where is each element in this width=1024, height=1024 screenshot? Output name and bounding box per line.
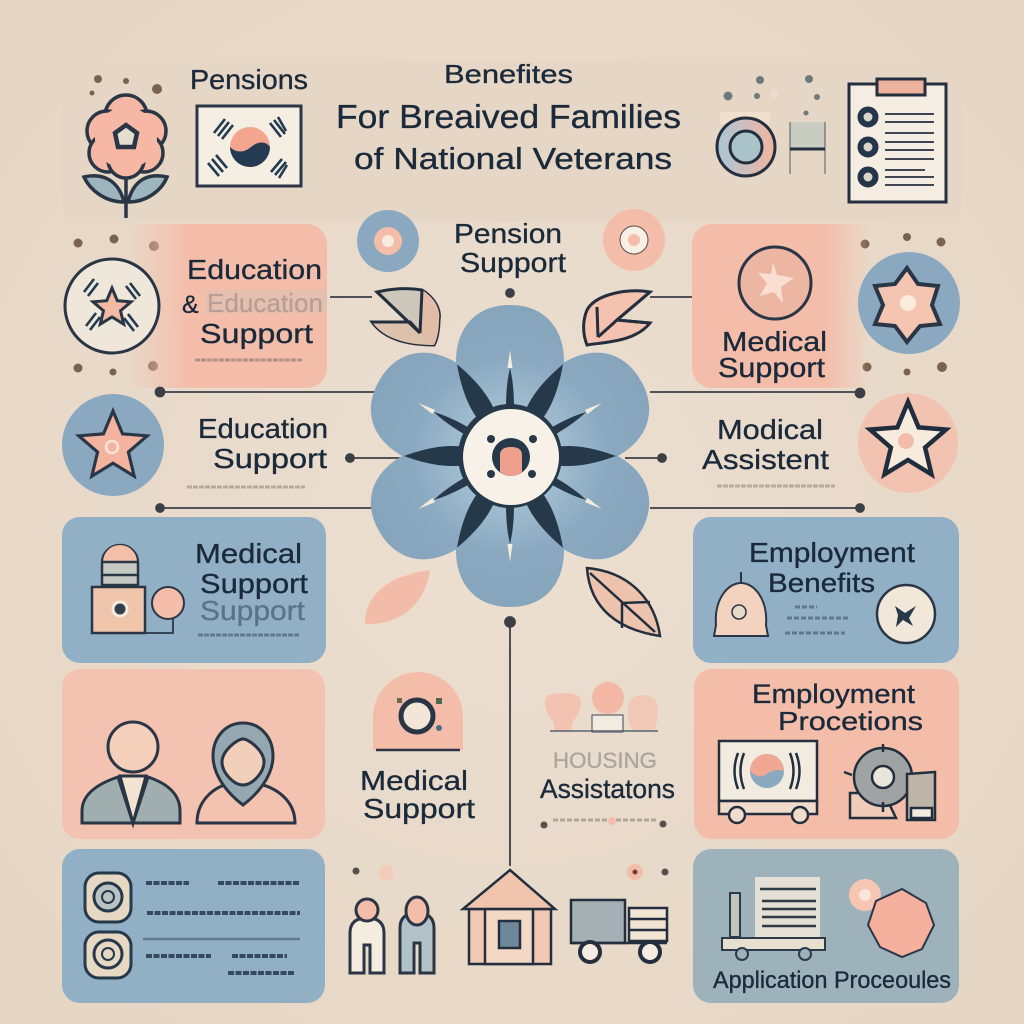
- panel: education support peach: Education: [207, 288, 323, 318]
- icon: medical dome: [373, 672, 463, 750]
- text: assistance: [540, 748, 675, 828]
- heading: education support: [187, 413, 328, 487]
- panel: medical support peach: Medical: [722, 326, 827, 357]
- text: assistance: HOUSING: [553, 748, 657, 773]
- text: assistance: Assistatons: [540, 774, 675, 804]
- icon: housing figures: [545, 682, 658, 732]
- panel: application procedures: Application Proceoules: [713, 967, 951, 994]
- panel: education support peach: Education: [187, 254, 322, 285]
- panel: employment benefits: Benefits: [768, 568, 875, 598]
- panel: medical support blue: [62, 517, 326, 663]
- panel: documents blue: [62, 849, 325, 1003]
- title: of National Veterans: [354, 141, 672, 176]
- icon: house: [463, 870, 555, 964]
- panel: medical support peach: [692, 224, 960, 388]
- panel: medical support peach: Support: [718, 352, 825, 383]
- panel: medical support blue: Support: [200, 595, 305, 626]
- heading: medical assistent: Modical: [717, 414, 823, 445]
- panel: education support peach: Support: [200, 318, 313, 349]
- decorative dots: [74, 75, 947, 376]
- icon: leaf lower left: [365, 570, 430, 624]
- heading: education support: Support: [213, 443, 327, 474]
- icon: top circle left: [357, 210, 419, 272]
- panel: header band: [62, 62, 962, 222]
- panel: medical support blue: Support: [200, 568, 308, 599]
- panel: couple: [62, 669, 325, 839]
- panel: employment procetions: Employment: [752, 679, 916, 709]
- title: Benefites: [444, 59, 573, 89]
- panel: employment procetions: [694, 669, 959, 839]
- heading: medical support: [360, 765, 475, 824]
- decorative dots bottom: [352, 864, 668, 881]
- connector lines: [156, 289, 864, 866]
- panel: application procedures: [693, 849, 959, 1003]
- heading: pensions: Pensions: [190, 64, 308, 95]
- icon: flag card: [197, 106, 301, 186]
- icon: clipboard: [849, 79, 946, 202]
- icon: header flower: [84, 95, 167, 218]
- panel: medical support blue: Medical: [195, 538, 302, 569]
- heading: medical support: Support: [363, 793, 475, 824]
- heading: medical assistent: [702, 414, 835, 486]
- panel: employment benefits: Employment: [749, 537, 915, 568]
- icon: leaf right: [584, 291, 650, 345]
- panel: employment benefits: [693, 517, 959, 663]
- title: For Breaived Families: [336, 98, 681, 135]
- panel: education support peach: &: [182, 291, 199, 319]
- panel: employment procetions: Procetions: [778, 706, 923, 736]
- icon: truck: [571, 900, 667, 962]
- icon: leaf left: [372, 289, 439, 345]
- heading: education support: Education: [198, 413, 328, 444]
- heading: pension support: Support: [460, 247, 566, 278]
- panel: education support peach: [65, 224, 327, 388]
- central flower: [352, 305, 668, 607]
- icon: two people: [350, 897, 434, 973]
- icon: top circle right: [603, 209, 665, 271]
- heading: medical support: Medical: [360, 765, 468, 796]
- icon: star badge left: [62, 394, 164, 496]
- icon: header ring and box: [717, 75, 825, 176]
- title: [336, 59, 681, 176]
- heading: pension support: [454, 218, 566, 278]
- heading: medical assistent: Assistent: [702, 444, 829, 475]
- heading: pension support: Pension: [454, 218, 562, 249]
- icon: star badge right: [858, 393, 958, 493]
- icon: leaf lower right: [587, 568, 660, 636]
